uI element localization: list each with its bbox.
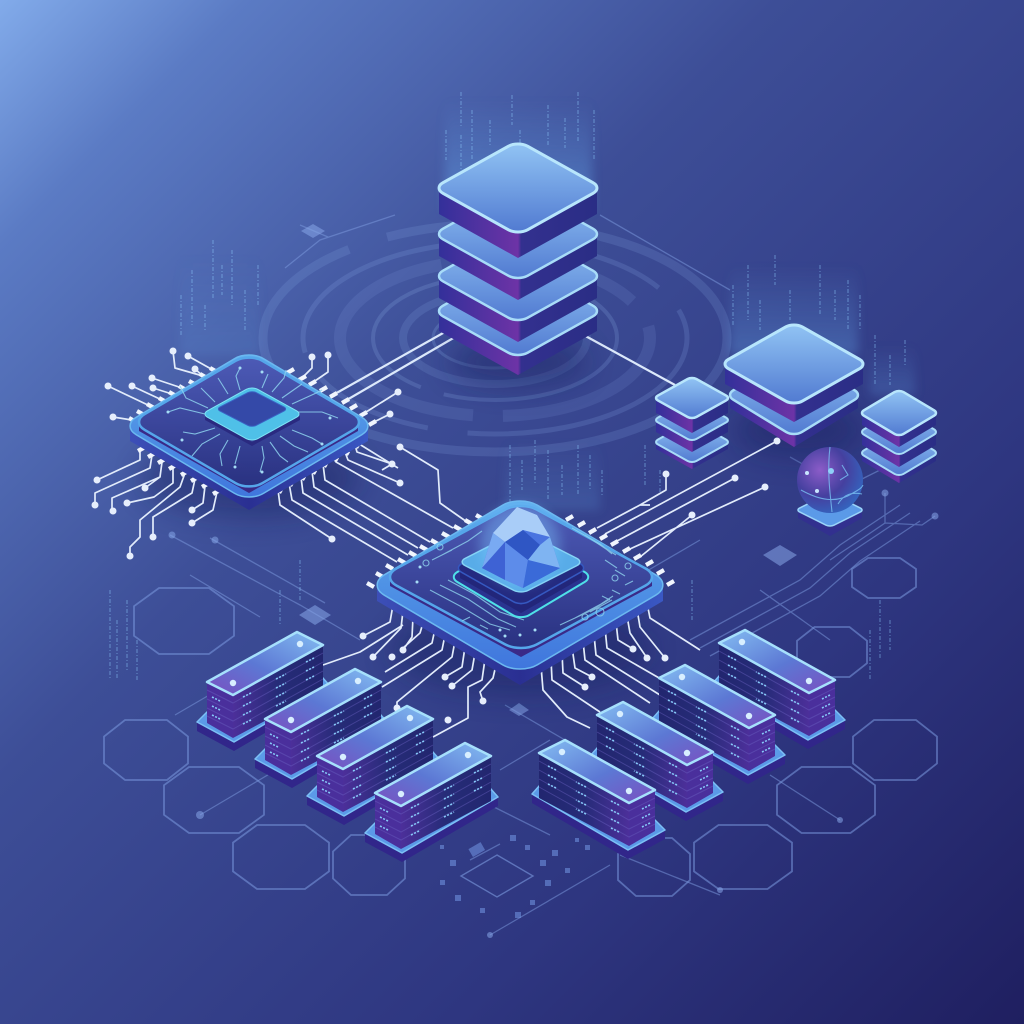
trace end dots: main chip: [363, 441, 777, 720]
server racks right group: [532, 630, 845, 859]
globe on pedestal: [796, 447, 864, 536]
trace end dots: left chip: [95, 351, 400, 556]
surface traces: [168, 368, 338, 472]
small stack left: [654, 377, 730, 469]
faint decorative nodes: [168, 224, 938, 938]
die core: [216, 391, 288, 427]
medium stack: [720, 322, 868, 447]
server racks left group: [197, 632, 498, 862]
small stack right: [859, 389, 939, 483]
outer plate: [122, 350, 376, 502]
surface dots: [417, 567, 535, 636]
data rain streaks: [110, 92, 905, 680]
hexagon outlines: [104, 558, 937, 896]
socket plate: [454, 530, 588, 606]
outer plate: [367, 495, 673, 675]
stack connector lines: [333, 328, 675, 401]
light glow columns: [180, 100, 915, 510]
chip pins: [129, 368, 376, 494]
crystal: [482, 507, 560, 588]
die frame: [202, 386, 302, 442]
chip pins: [367, 515, 674, 668]
faint background circuit lines: [170, 215, 935, 935]
left processor chip: [122, 350, 376, 510]
socket outline: [449, 534, 593, 620]
crystal pedestal: [458, 530, 584, 594]
soft shadows: [140, 337, 863, 695]
circuit traces: main chip: [323, 441, 777, 737]
die glow: [202, 386, 302, 442]
inner surface: [381, 501, 661, 653]
surface circuitry: [423, 528, 633, 630]
surface dots: [168, 368, 330, 472]
central server stack: [433, 141, 603, 375]
bottom circuit board pattern: [440, 835, 590, 918]
crystal glow: [480, 505, 560, 585]
circuit traces: left chip: [95, 351, 467, 562]
inner surface: [131, 353, 367, 491]
main processor chip: [367, 495, 674, 685]
concentric hud rings: [263, 224, 727, 452]
